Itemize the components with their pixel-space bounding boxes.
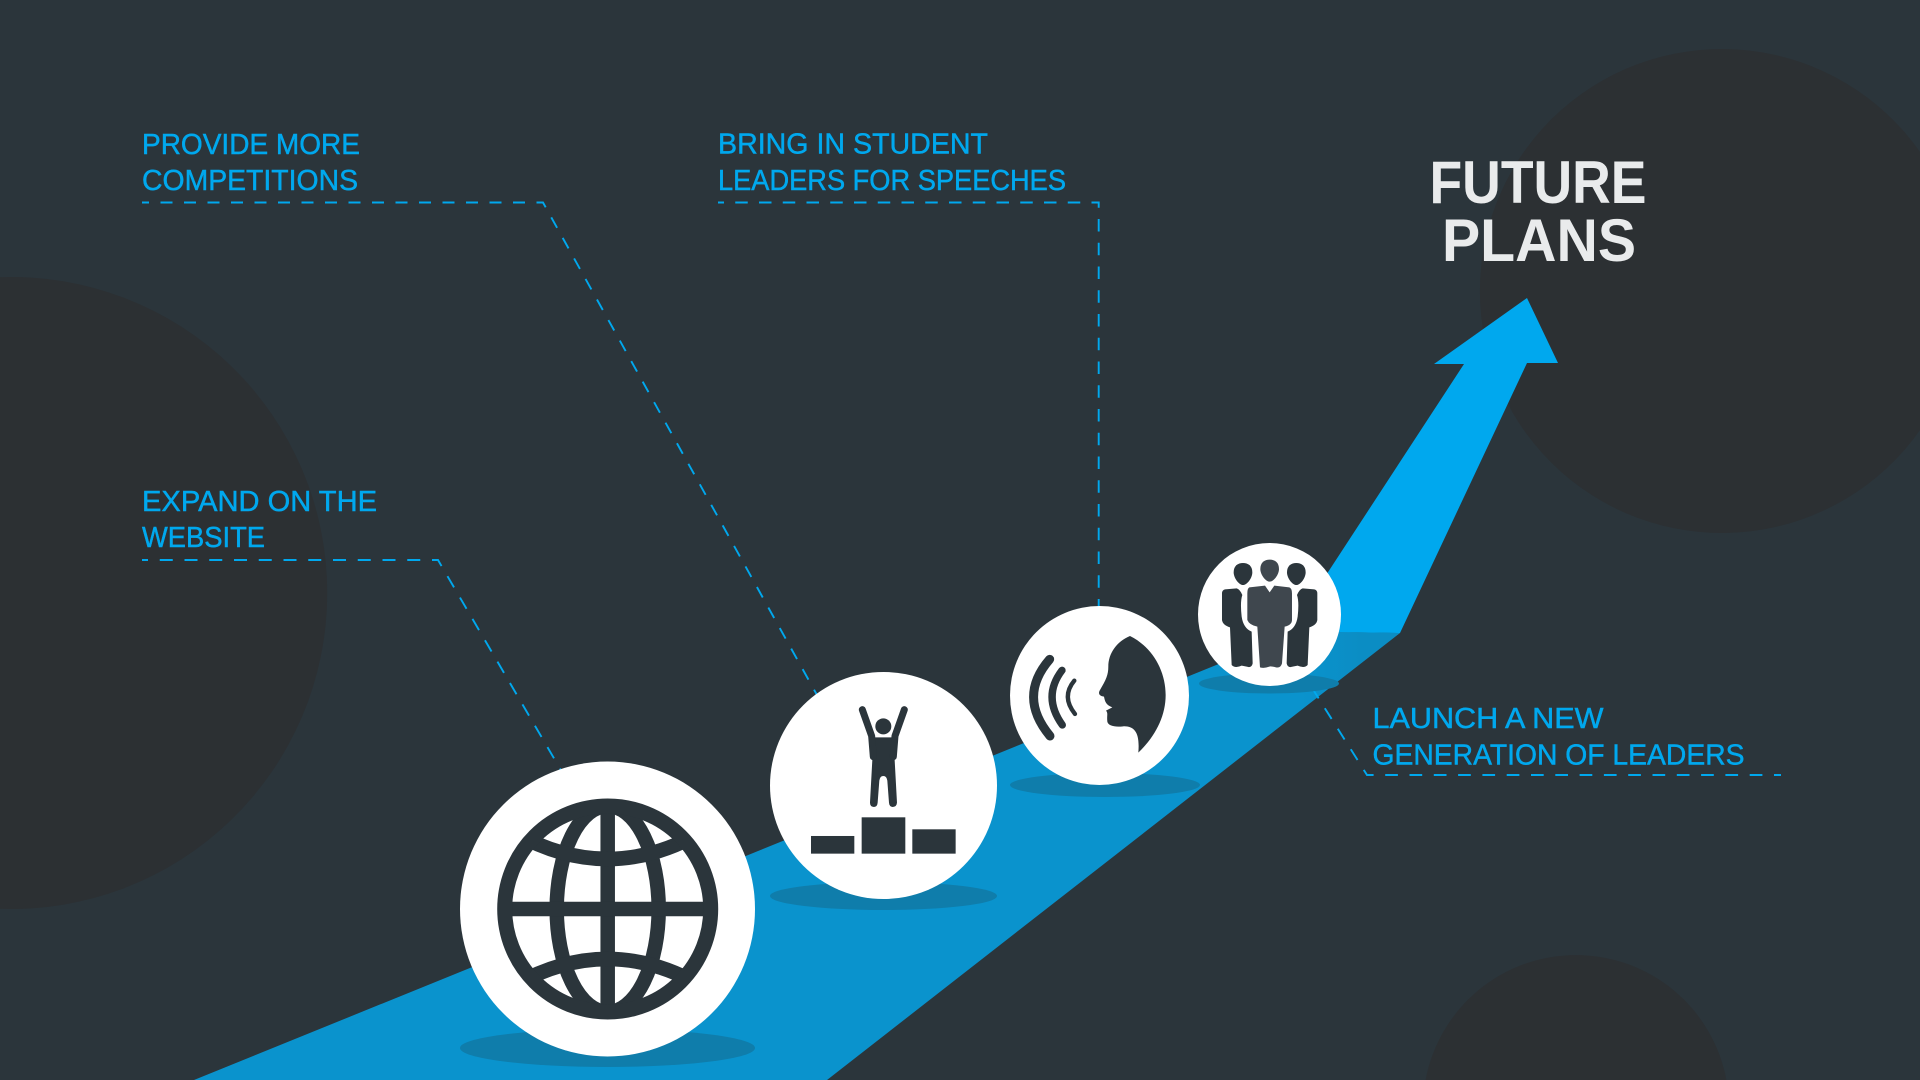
title: PLANS [1442, 207, 1636, 274]
leader line: launch a new generation [1307, 680, 1781, 775]
icon: globe [460, 762, 755, 1056]
background circle: bottom right [1426, 955, 1726, 1080]
text: bring in student leaders for speeches: BRING IN STUDENT [718, 128, 988, 160]
text: launch a new generation of leaders [1372, 703, 1744, 772]
text: launch a new generation of leaders: GENERATION OF LEADERS [1372, 740, 1744, 772]
shadow: globe [460, 1029, 755, 1067]
shadow: team [1199, 674, 1339, 694]
text: expand on the website [142, 486, 377, 554]
leader line: expand on the website [142, 560, 562, 772]
background circle: left [0, 277, 327, 909]
road: rising arrow path [194, 298, 1558, 1080]
icon: speaking head [1010, 606, 1189, 785]
text: provide more competitions: PROVIDE MORE [142, 129, 360, 161]
text: bring in student leaders for speeches: LEADERS FOR SPEECHES [718, 165, 1066, 197]
leader line: provide more competitions [142, 202, 817, 695]
title: FUTURE [1430, 149, 1646, 216]
icon: team of three people [1198, 543, 1341, 686]
text: provide more competitions: COMPETITIONS [142, 165, 358, 197]
shadow: podium [770, 882, 997, 910]
text: provide more competitions [142, 129, 360, 197]
text: bring in student leaders for speeches [718, 128, 1066, 197]
title [1430, 149, 1646, 274]
icon: person on podium [770, 672, 997, 899]
shadow: speaker [1010, 773, 1200, 797]
arrow: bright shaft and head [1300, 298, 1558, 633]
text: launch a new generation of leaders: LAUNCH A NEW [1372, 703, 1604, 735]
text: expand on the website: WEBSITE [142, 522, 265, 554]
background circle: top right [1480, 49, 1920, 533]
leader line: bring in student leaders [718, 202, 1099, 610]
text: expand on the website: EXPAND ON THE [142, 486, 377, 518]
